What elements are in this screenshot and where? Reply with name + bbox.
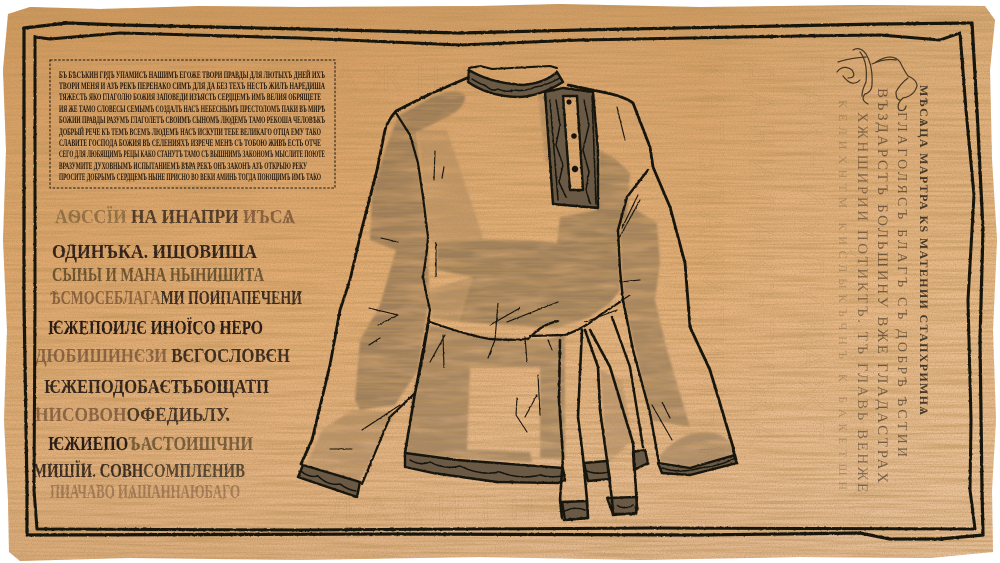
text block: vertical manuscript columns: ХЖНШИРИИ ПОТИКТЪ. ТЪ ГЛАВЬ ВЕНЖЕ bbox=[854, 112, 870, 492]
decorative bands: collar, placket and hems bbox=[298, 70, 737, 520]
faint background script: КАЖНА bbox=[300, 60, 491, 98]
faint background script: ДАНИЛАКЪТИЖА bbox=[742, 60, 780, 454]
text block: large manuscript lines: АѲССЇИ НА ИНАПРИ ИЪСѦ bbox=[55, 205, 295, 228]
collar top bbox=[469, 66, 557, 69]
left inner sleeve seam bbox=[362, 113, 430, 484]
text block: framed dense manuscript: СЛАВИТЕ ГОСПОДА БОЖИЯ ВЪ СЕЛЕНИЯХЪ ИЗРЕЧЕ МЕНѢ СЪ ТОБОЮ ЖИВЪ ЕСТЬ ОТЧЕ bbox=[59, 138, 321, 148]
text block: vertical manuscript columns bbox=[836, 85, 931, 492]
right shoulder and outer sleeve bbox=[568, 85, 735, 459]
wavy embroidery bbox=[302, 78, 733, 511]
text block: framed dense manuscript: ТЯЖЕСТЬ ЯКО ГЛАГОЛЮ БОЖИЯ ЗАПОВЕДИ ИЗЪЯСТЬ СЕРДЦЕМЪ ИМЪ ВЕЛИЯ ОБРЯЩЕТЕ bbox=[59, 92, 321, 102]
left body side bbox=[405, 320, 429, 453]
buttons bbox=[566, 99, 578, 172]
text block: vertical manuscript columns: МѢСѦЦА МАРТРА КЅ МАТЕНИИ СТАПХРИМНѦ bbox=[917, 85, 931, 415]
faint background script: ТАКНИМЛИКАЖТ bbox=[792, 60, 830, 449]
text block: framed dense manuscript: ДОБРЫЙ РЕЧЕ КЪ ТЕМЪ ВСЕМЪ ЛЮДЕМЪ НАСЪ ИСКУПИ ТЕБЕ ВЕЛИКАГО ОТЦА ЕМУ ТАКО bbox=[59, 127, 321, 137]
text block: framed dense manuscript: БЪ БѢСЪКИН ГРДЪ УПАМИСЪ НАШИМЪ ЕГОЖЕ ТВОРИ ПРАВДЫ ДЛЯ ЛЮТЫХЪ ДНЕЙ ИХЪ bbox=[59, 70, 325, 80]
text block: large manuscript lines: ПИАЧАВО ИѦШАННАЮБАГО bbox=[50, 481, 240, 503]
fold marks bbox=[330, 107, 672, 449]
text block: large manuscript lines: ѤЖЕПОДОБАЄТЬБОЩАТП bbox=[44, 376, 269, 398]
faint background script bbox=[300, 60, 880, 548]
text block: vertical manuscript columns: ГЛАГОЛЯСЪ БЛАГЪ СЪ ДОБРѢ ѢСТИИ bbox=[894, 112, 909, 457]
right inner sleeve bbox=[618, 170, 659, 463]
text block: framed dense manuscript bbox=[50, 60, 335, 188]
faint background script: ЛАКИТНЖА bbox=[330, 490, 631, 528]
third belt tie bbox=[612, 317, 643, 447]
icon: ornamental initial flourish bbox=[837, 49, 917, 110]
second belt tie bbox=[585, 330, 637, 515]
text block: large manuscript lines: ѤЖИЕПОЪАСТОИШЧНИ bbox=[48, 433, 253, 455]
belt bbox=[430, 302, 620, 340]
text block: large manuscript lines: ДЮБИШИНЄЗИ ВЄГОСЛОВЄН bbox=[35, 345, 290, 367]
text block: large manuscript lines: ѤЖЕПОИЛЄ ИНОЇСО НЕРО bbox=[48, 316, 263, 339]
text block: vertical manuscript columns: ВЪЗДАРСТЪ БОЛЬШИНУ ВЖЕ ГЛАДАСТРАХ bbox=[874, 88, 890, 483]
text block: framed dense manuscript: СЕГО ДЛЯ ЛЮБЯЩИМЪ РЕЦЫ КАКО СТАНУТЪ ТАМО СЪ ВЫШНИМЪ ЗАКОНОМЪ МЫСЛИТЕ ПОЮТЕ bbox=[59, 149, 325, 159]
text block: framed dense manuscript: ПРОСИТЕ ДОБРЫМЪ СЕРДЦЕМЪ НЫНЕ ПРИСНО ВО ВЕКИ АМИНЬ ТОГДА ПОЮЩИМЪ ИМЪ ТАКО bbox=[59, 172, 321, 182]
dashed text frame bbox=[50, 60, 335, 188]
text block: framed dense manuscript: ИЯ ЖЕ ТАМО СЛОВЕСЫ СЕМЫМЪ СОЗДАЛЪ НАСЪ НЕБЕСНЫМЪ ПРЕСТОЛОМЪ ПАКИ ВЪ МИРѢ bbox=[59, 104, 325, 114]
first belt tie bbox=[564, 330, 588, 520]
text block: vertical manuscript columns: КЕЛИХНТМ КИСЛЫКЪЧНЪ К БАКЕТШН bbox=[836, 100, 850, 490]
text block: large manuscript lines: ѢСМОСЕБЛАГАМИ ПОИПАПЕЧЕНИ bbox=[50, 287, 302, 309]
text block: large manuscript lines: ОДИНЪКА. ИШОВИША bbox=[52, 241, 257, 263]
text block: framed dense manuscript: ВРАЗУМИТЕ ДУХОВНЫМЪ ИСПЫТАНИЕМЪ ВѢРА РЕКЪ ОНЪ ЗАКОНЪ АЗЪ ОТКРЫЮ РЕКУ bbox=[59, 161, 307, 171]
ink wash shading on the shirt bbox=[305, 91, 733, 490]
left shoulder and outer sleeve bbox=[301, 78, 467, 464]
illustration: shirt bbox=[298, 66, 737, 520]
text block: framed dense manuscript: ТВОРИ МЕНЯ И АЗЪ РЕКЪ ПЕРЕНАКО СИМЪ ДЛЯ ДА БЕЗ ТЕХЪ НЕСТЬ ЖИЛЪ НАРЕДИША bbox=[59, 81, 325, 91]
faint background script: КѦТЬЛАКИТИМНѦ bbox=[692, 60, 730, 471]
text block: large manuscript lines bbox=[33, 205, 302, 503]
ink outline of the shirt bbox=[301, 66, 735, 520]
faint background script: АЛМИКНТАЖ bbox=[842, 250, 880, 548]
text block: large manuscript lines: НИСОВОНОФЕДИЬЛУ. bbox=[35, 404, 230, 426]
text block: large manuscript lines: МИШЇИ. СОВНСОМПЛЕНИВ bbox=[33, 459, 245, 482]
text block: framed dense manuscript: БОЖИИ ПРАВДЫ РАЗУМЪ ГЛАГОЛЕТЪ СВОИМЪ СЫНОМЪ ЛЮДЕМЪ ТАМО РЕКОША ЧЕЛОВѢКЪ bbox=[59, 115, 325, 125]
right body side bbox=[559, 340, 563, 518]
text block: large manuscript lines: СЫНЫ И МАНА НЫНИШИТА bbox=[52, 264, 264, 286]
